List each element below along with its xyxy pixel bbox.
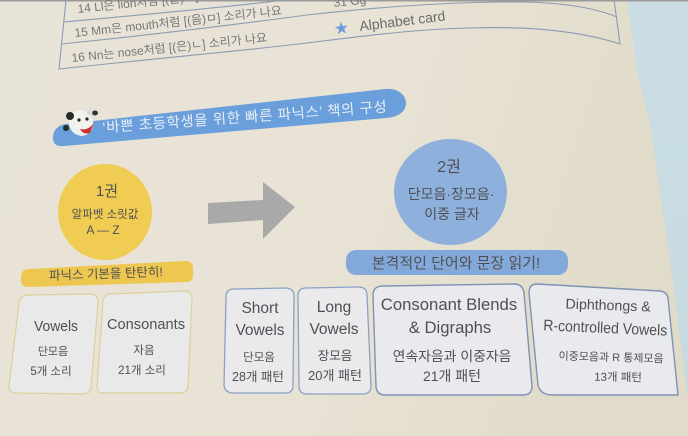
row 16: 16 Nn는 nose처럼 [(은)ㄴ] 소리가 나요 <box>71 31 268 65</box>
card: long vowels: Vowels <box>309 321 359 338</box>
volume 2 title: 2권 <box>437 158 461 176</box>
card: diphthongs and r-controlled vowels: 이중모음과 R 통제모음 <box>558 350 664 365</box>
card: short vowels: Vowels <box>235 322 285 339</box>
card: consonant blends and digraphs: & Digraphs <box>409 318 491 337</box>
volume 1 description: 알파벳 소릿값 <box>72 207 139 221</box>
card: vowels <box>9 294 98 394</box>
section heading banner <box>53 89 406 146</box>
card: short vowels: Short <box>241 300 279 317</box>
icon: star: ★ <box>334 19 349 37</box>
card: diphthongs and r-controlled vowels <box>529 284 678 395</box>
volume 2 description: 단모음·장모음· <box>408 186 494 202</box>
card: long vowels: Long <box>317 299 351 316</box>
volume 2 circle: 이중 글자 <box>424 206 480 222</box>
heading text: ‘바쁜 초등학생을 위한 빠른 파닉스’ 책의 구성 <box>102 99 387 136</box>
card: diphthongs and r-controlled vowels: Diphthongs & <box>565 297 652 316</box>
top shadow strip <box>0 0 688 2</box>
card: consonants: 자음 <box>133 344 155 357</box>
card: short vowels <box>224 288 294 393</box>
volume 2 circle <box>394 139 507 245</box>
card: consonant blends and digraphs: 연속자음과 이중자음 <box>393 348 512 364</box>
card: vowels: 단모음 <box>38 345 68 358</box>
volume 1 banner: 파닉스 기본을 탄탄히! <box>49 265 163 283</box>
card: short vowels: 단모음 <box>243 351 275 364</box>
checklist table <box>59 0 620 69</box>
card: consonant blends and digraphs: 21개 패턴 <box>423 368 481 384</box>
icon: mascot <box>63 106 98 140</box>
card: long vowels: 장모음 <box>318 349 352 363</box>
volume 1 circle: A — Z <box>86 223 120 237</box>
volume 2 banner <box>346 250 568 275</box>
volume 2 banner: 본격적인 단어와 문장 읽기! <box>372 255 540 272</box>
card: consonant blends and digraphs: Consonant Blends <box>381 295 517 314</box>
card: short vowels: 28개 패턴 <box>232 370 284 384</box>
volume 1 title: 1권 <box>96 183 118 200</box>
volume 1 circle <box>58 164 152 260</box>
card: consonants <box>97 291 192 393</box>
background beyond the page edge <box>627 0 688 400</box>
card: consonant blends and digraphs <box>373 284 532 395</box>
card: long vowels <box>298 287 371 394</box>
card: diphthongs and r-controlled vowels: 13개 패턴 <box>594 371 642 384</box>
alphabet card label: Alphabet card <box>358 8 446 34</box>
row 15: 15 Mm은 mouth처럼 [(음)ㅁ] 소리가 나요 <box>74 4 283 40</box>
card: consonants: 21개 소리 <box>118 364 166 377</box>
volume 1 banner <box>21 261 193 287</box>
card: vowels: 5개 소리 <box>30 365 72 378</box>
card: vowels: Vowels <box>34 319 78 335</box>
card: long vowels: 20개 패턴 <box>308 368 362 383</box>
card: consonants: Consonants <box>107 317 185 333</box>
arrow <box>208 182 295 239</box>
card: diphthongs and r-controlled vowels: R-controlled Vowels <box>543 317 668 340</box>
